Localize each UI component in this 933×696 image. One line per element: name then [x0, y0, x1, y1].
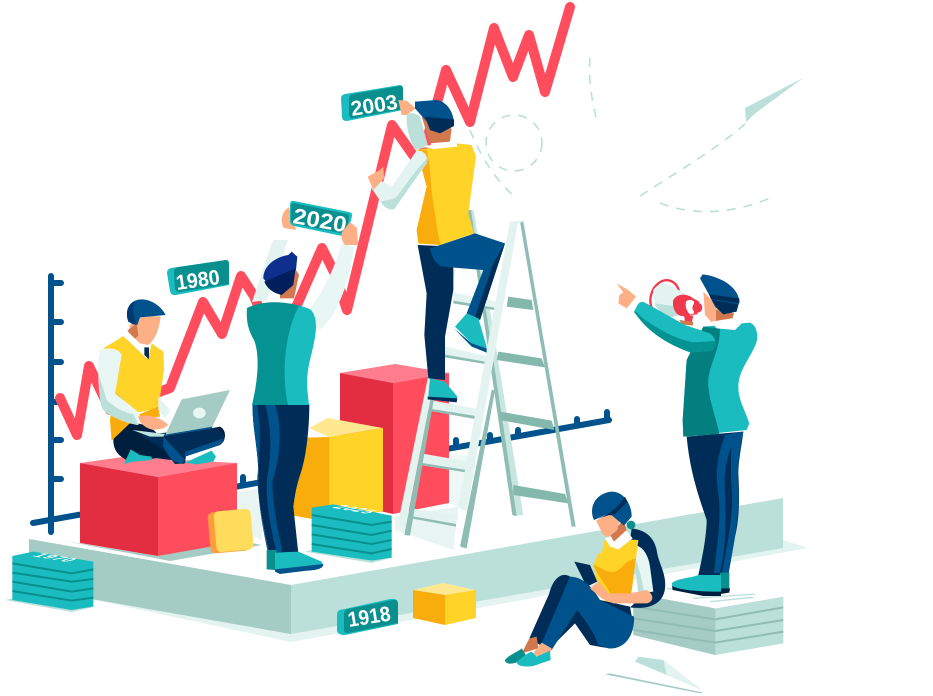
collar — [605, 530, 633, 549]
ankles — [522, 637, 552, 658]
jacket — [247, 302, 311, 405]
legs — [529, 575, 634, 650]
vest — [417, 143, 476, 245]
cap — [700, 274, 739, 314]
back sleeve — [630, 545, 653, 593]
chart horizontal axis — [33, 412, 609, 523]
trousers raised leg — [430, 233, 505, 320]
icon: paper plane top right — [745, 78, 803, 122]
ponytail — [630, 528, 665, 608]
pointing hand — [617, 283, 636, 308]
standing shoe — [428, 378, 457, 402]
stack of cards 2025 — [305, 504, 395, 563]
hair — [592, 492, 632, 526]
ladder front rungs — [411, 293, 495, 527]
far sleeve — [158, 397, 170, 418]
dashed flight paths and circle — [470, 58, 770, 212]
year tag 2003: 2003 — [349, 91, 399, 121]
platform — [25, 498, 808, 642]
person: woman reading tablet — [505, 492, 665, 666]
tag 2020: 2020 — [291, 203, 349, 237]
raised arm — [407, 113, 428, 150]
head — [127, 299, 166, 345]
ladder back rails and rungs — [468, 210, 576, 527]
cuff — [627, 297, 638, 312]
person: man with megaphone — [617, 274, 757, 596]
yellow box — [290, 418, 383, 522]
neck — [422, 117, 452, 143]
person: man climbing the ladder — [368, 100, 505, 402]
megaphone — [646, 277, 702, 326]
jacket — [683, 323, 757, 437]
near shoulder sleeve hint — [597, 538, 605, 553]
red rising line chart — [60, 7, 570, 435]
shoes — [505, 648, 551, 666]
year tag 2003 — [341, 85, 403, 121]
person: standing man holding 2020 tag — [247, 201, 358, 574]
year tag 1918 — [337, 599, 398, 635]
forearm and hand — [590, 582, 652, 603]
raised shoe — [454, 313, 487, 353]
raised left arm — [252, 240, 288, 302]
cap — [415, 100, 454, 133]
shadows on platform — [65, 488, 262, 561]
stack of cards 2025: 2025 — [328, 504, 382, 515]
ladder front rails — [398, 220, 527, 548]
shoes — [124, 449, 216, 464]
vest — [103, 336, 164, 441]
collar and tie — [123, 331, 152, 359]
trousers — [253, 403, 323, 574]
vest — [593, 538, 638, 603]
person: seated man with laptop — [98, 299, 230, 464]
shoes — [672, 573, 730, 596]
hand holding tag — [398, 100, 416, 115]
left hand — [368, 167, 384, 190]
tablet — [574, 562, 597, 587]
chart vertical axis — [51, 276, 61, 532]
red box with seated man — [80, 457, 237, 556]
neck and face — [596, 513, 627, 542]
head and cap — [263, 252, 299, 298]
year tag 1918: 1918 — [346, 602, 393, 632]
hand right — [341, 222, 358, 245]
paper stack — [633, 585, 783, 655]
trousers — [687, 432, 743, 575]
hand left — [282, 207, 296, 230]
icon: paper plane bottom — [605, 657, 703, 693]
near sleeve — [98, 348, 140, 425]
year tag 1980 — [167, 260, 229, 295]
collar — [423, 142, 457, 149]
laptop — [132, 390, 230, 437]
left sleeve — [372, 151, 428, 209]
hair tie — [627, 521, 635, 529]
collar and neck — [703, 292, 742, 330]
tall red box — [340, 364, 449, 514]
year tag 1980: 1980 — [174, 266, 221, 295]
raised right arm — [303, 243, 354, 330]
pointing arm — [634, 302, 715, 352]
hand — [138, 416, 168, 430]
trousers standing leg — [418, 245, 453, 380]
ladder shadow panels — [395, 453, 475, 550]
orange cube — [413, 583, 476, 625]
trousers — [113, 423, 225, 464]
ladder — [395, 210, 576, 550]
stack of cards 1970 — [5, 552, 98, 612]
stack of cards 1970: 1970 — [28, 552, 82, 563]
small yellow cube — [207, 508, 254, 554]
